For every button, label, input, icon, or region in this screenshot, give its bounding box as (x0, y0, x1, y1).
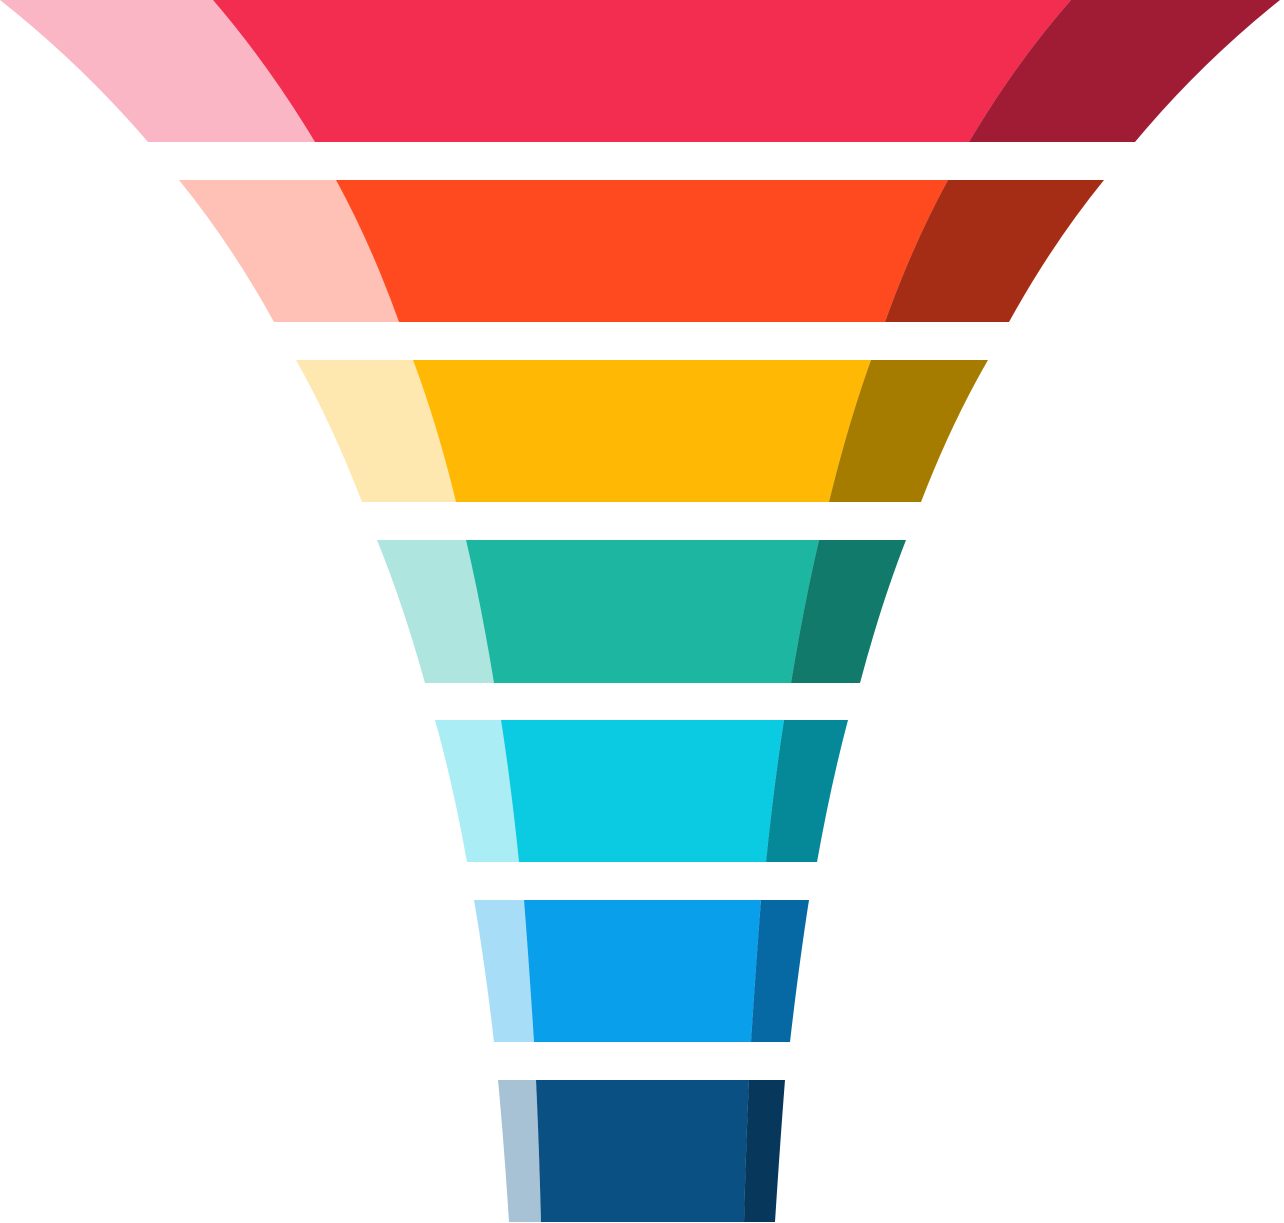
funnel band 7 (498, 1080, 785, 1222)
funnel band 4 (377, 540, 906, 683)
funnel band 1 (0, 0, 1280, 142)
funnel band 5 (435, 720, 848, 862)
funnel band 6 (474, 900, 809, 1042)
funnel band 3 (296, 360, 988, 502)
funnel band 2 (179, 180, 1104, 322)
